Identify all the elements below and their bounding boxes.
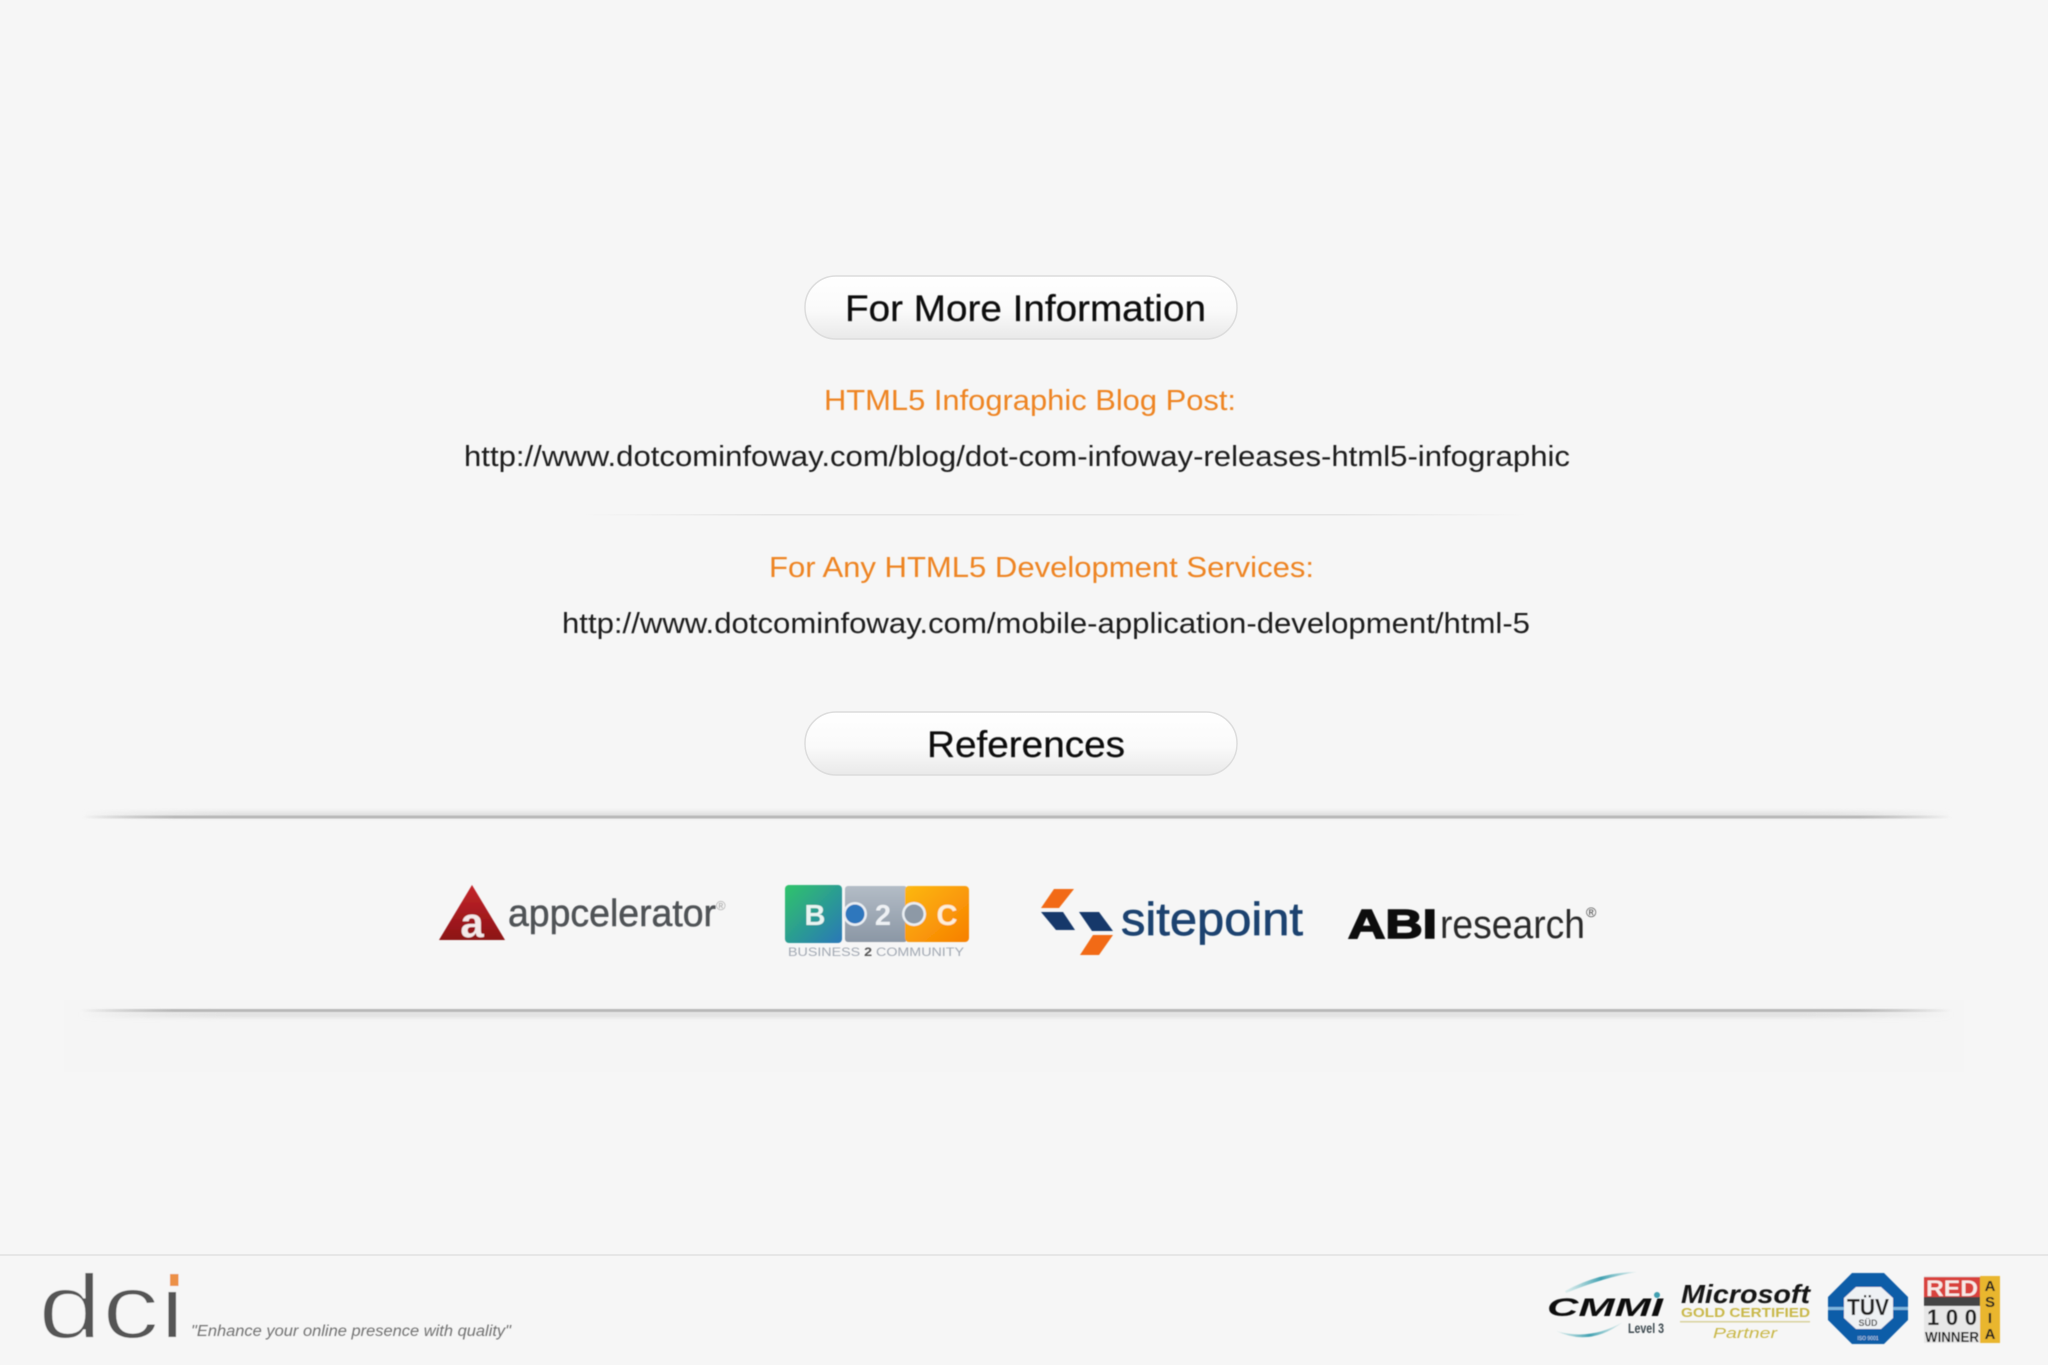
logo: appcelerator: appcelerator xyxy=(508,893,716,935)
certification: Red Herring Asia 100 Winner: S xyxy=(1985,1294,1995,1311)
heading pill: References: References xyxy=(927,724,1125,765)
text block: development services link: For Any HTML5 Development Services: xyxy=(769,552,1314,584)
certification: TUV SUD badge: ISO 9001 xyxy=(1857,1336,1879,1342)
logo: appcelerator xyxy=(439,885,726,946)
certification: TUV SUD badge: TÜV xyxy=(1847,1294,1890,1320)
certification: CMMI Level 3 xyxy=(1547,1272,1665,1337)
logo: ABI research: ® xyxy=(1586,904,1597,920)
certification: Red Herring Asia 100 Winner: A xyxy=(1985,1326,1996,1343)
icon: sitepoint chevrons xyxy=(1041,889,1113,955)
certification: Red Herring Asia 100 Winner xyxy=(1924,1276,2000,1346)
heading pill: For More Information xyxy=(805,276,1237,339)
certification: Microsoft Gold Certified Partner: Microsoft xyxy=(1681,1279,1811,1309)
certification: Microsoft Gold Certified Partner: GOLD CERTIFIED xyxy=(1681,1305,1810,1320)
text block: blog post link xyxy=(464,385,1570,473)
certification: TUV SUD badge xyxy=(1828,1273,1908,1344)
certification: Red Herring Asia 100 Winner: RED xyxy=(1926,1276,1978,1301)
certification: CMMI Level 3: Level 3 xyxy=(1628,1320,1664,1336)
certification: Red Herring Asia 100 Winner: WINNER xyxy=(1925,1329,1979,1346)
icon: puzzle pieces: 2 xyxy=(875,900,891,932)
footer logo: dci with tagline xyxy=(38,1257,513,1358)
icon: puzzle pieces: C xyxy=(937,900,958,932)
logo: sitepoint xyxy=(1041,889,1303,955)
icon: red triangle: a xyxy=(460,899,484,946)
heading pill: For More Information: For More Information xyxy=(845,288,1206,329)
certification: Red Herring Asia 100 Winner: 100 xyxy=(1927,1305,1977,1330)
certification: Microsoft Gold Certified Partner xyxy=(1680,1279,1811,1342)
icon: puzzle pieces: B xyxy=(805,900,825,932)
text block: blog post link: HTML5 Infographic Blog Post: xyxy=(824,385,1236,417)
certification: CMMI Level 3: CMMI xyxy=(1547,1294,1665,1322)
text block: development services link xyxy=(562,552,1530,640)
icon: puzzle pieces xyxy=(785,885,969,943)
logo: ABI research xyxy=(1348,901,1597,947)
certification: Red Herring Asia 100 Winner: I xyxy=(1988,1310,1992,1327)
logo: sitepoint: sitepoint xyxy=(1121,893,1303,945)
logo: appcelerator: ® xyxy=(716,898,726,913)
logo: B2C Business 2 Community xyxy=(785,885,969,959)
heading pill: References xyxy=(805,712,1237,775)
footer logo: dci with tagline: "Enhance your online presence with quality" xyxy=(191,1323,513,1340)
footer logo: dci with tagline: dci xyxy=(38,1257,185,1358)
logo: ABI research: ABI xyxy=(1348,901,1437,947)
logo: B2C Business 2 Community: BUSINESS 2 COMMUNITY xyxy=(788,945,964,959)
logo: ABI research: research xyxy=(1440,903,1585,947)
icon: red triangle xyxy=(439,885,505,946)
text block: development services link: http://www.dotcominfoway.com/mobile-application-development/html-5 xyxy=(562,608,1530,640)
certification: TUV SUD badge: SÜD xyxy=(1858,1318,1878,1328)
certification: Microsoft Gold Certified Partner: Partner xyxy=(1713,1325,1778,1342)
text block: blog post link: http://www.dotcominfoway.com/blog/dot-com-infoway-releases-html5-infographic xyxy=(464,441,1570,473)
certification: Red Herring Asia 100 Winner: A xyxy=(1985,1278,1996,1295)
